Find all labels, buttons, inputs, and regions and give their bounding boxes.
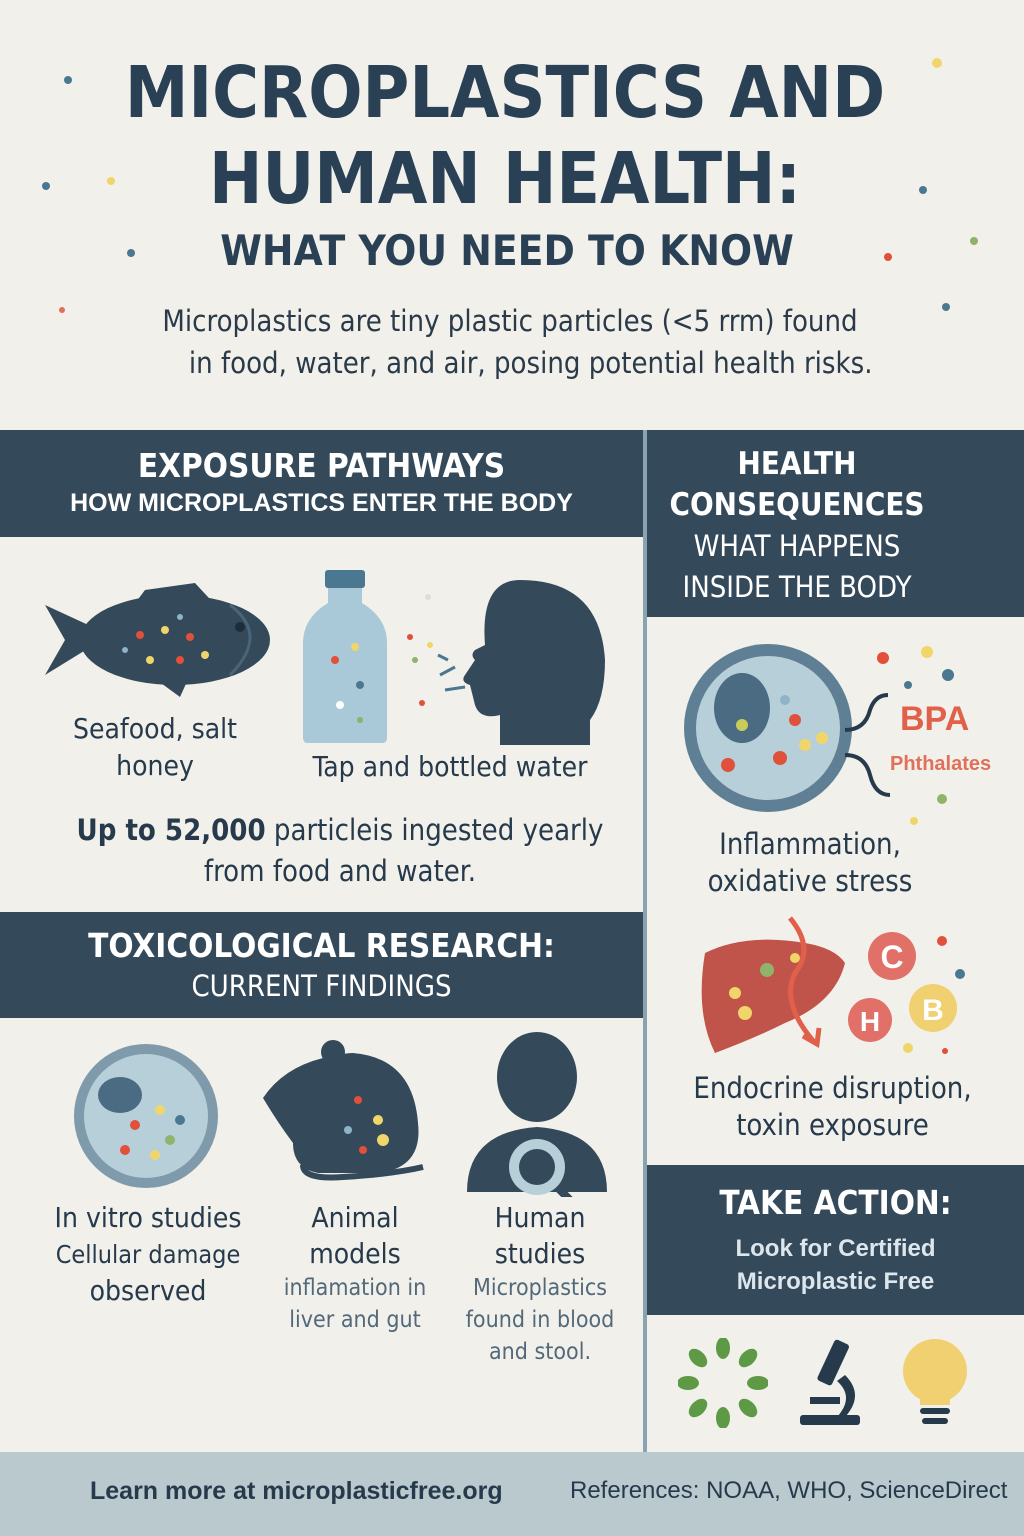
panel: health consequences header: INSIDE THE BODY [682, 570, 912, 604]
panel: toxicology header: TOXICOLOGICAL RESEARCH: [88, 926, 555, 965]
decorative dots [42, 58, 978, 313]
label: human: Human [495, 1201, 585, 1234]
panel: exposure header: HOW MICROPLASTICS ENTER THE BODY [70, 489, 573, 517]
icon: liver with C H B [702, 916, 965, 1054]
panel: take action: Look for Certified [735, 1235, 936, 1262]
icon: lightbulb [903, 1339, 967, 1424]
icon: cell with BPA: BPA [900, 700, 969, 738]
title: MICROPLASTICS AND [125, 51, 885, 134]
icon: petri dish [74, 1044, 218, 1188]
label: animal: inflamation in [284, 1275, 426, 1301]
title: HUMAN HEALTH: [209, 137, 801, 220]
intro text [162, 304, 873, 380]
label: endocrine [693, 1071, 972, 1142]
panel: take action: TAKE ACTION: [719, 1183, 952, 1222]
panel: exposure header: EXPOSURE PATHWAYS [138, 446, 505, 485]
label: in vitro: In vitro studies [55, 1201, 241, 1234]
panel: health consequences header: WHAT HAPPENS [694, 529, 900, 563]
icon: head breathing [407, 580, 605, 745]
label: animal: Animal [311, 1201, 399, 1234]
subtitle heading: WHAT YOU NEED TO KNOW [220, 226, 794, 275]
stat text: from food and water. [204, 854, 476, 888]
label: in vitro: Cellular damage [56, 1240, 240, 1269]
icon: liver with C H B: B [922, 994, 944, 1027]
label: human: Microplastics [473, 1275, 607, 1301]
footer [0, 1452, 1024, 1536]
footer: References: NOAA, WHO, ScienceDirect [570, 1477, 1007, 1504]
label: endocrine: Endocrine disruption, [693, 1071, 972, 1105]
divider [643, 430, 647, 1452]
icon: cell with BPA [684, 644, 991, 825]
panel: health consequences header: CONSEQUENCES [669, 487, 924, 523]
icon: liver with C H B: C [880, 939, 904, 975]
label: in vitro: observed [90, 1274, 206, 1307]
panel: take action [647, 1165, 1024, 1315]
panel: toxicology header: CURRENT FINDINGS [191, 969, 452, 1003]
panel: exposure header [0, 430, 643, 537]
label: water: Tap and bottled water [312, 750, 587, 783]
label: inflammation [708, 827, 912, 898]
icon: human with magnifier [467, 1032, 607, 1197]
label: seafood: honey [116, 749, 194, 782]
title [125, 51, 885, 220]
label: endocrine: toxin exposure [736, 1108, 929, 1142]
label: human: found in blood [466, 1307, 614, 1333]
label: in vitro [55, 1201, 241, 1307]
icon: mouse [263, 1040, 424, 1180]
stat text [77, 813, 603, 888]
label: animal: liver and gut [289, 1307, 421, 1333]
icon: microscope [800, 1340, 860, 1425]
label: human: studies [495, 1237, 585, 1270]
icon: fish [45, 583, 270, 697]
icon: leaf wreath [678, 1338, 768, 1428]
label: animal [284, 1201, 426, 1333]
icon: water bottle [303, 570, 387, 743]
panel: health consequences header: HEALTH [738, 446, 856, 482]
label: human [466, 1201, 614, 1365]
intro text: Microplastics are tiny plastic particles (<5 rrm) found [162, 304, 858, 338]
panel: toxicology header [0, 912, 643, 1018]
footer: Learn more at microplasticfree.org [90, 1477, 503, 1505]
panel: health consequences header [647, 430, 1024, 617]
intro text: in food, water, and air, posing potential health risks. [189, 346, 873, 380]
label: inflammation: oxidative stress [708, 864, 912, 898]
label: human: and stool. [489, 1339, 591, 1365]
label: inflammation: Inflammation, [719, 827, 901, 861]
label: seafood: Seafood, salt [73, 712, 237, 745]
icon: liver with C H B: H [860, 1006, 880, 1037]
label: animal: models [309, 1237, 401, 1270]
icon: cell with BPA: Phthalates [890, 753, 991, 775]
panel: take action: Microplastic Free [737, 1268, 934, 1295]
label: seafood [73, 712, 237, 782]
stat text: Up to 52,000 particleis ingested yearly [77, 813, 603, 847]
